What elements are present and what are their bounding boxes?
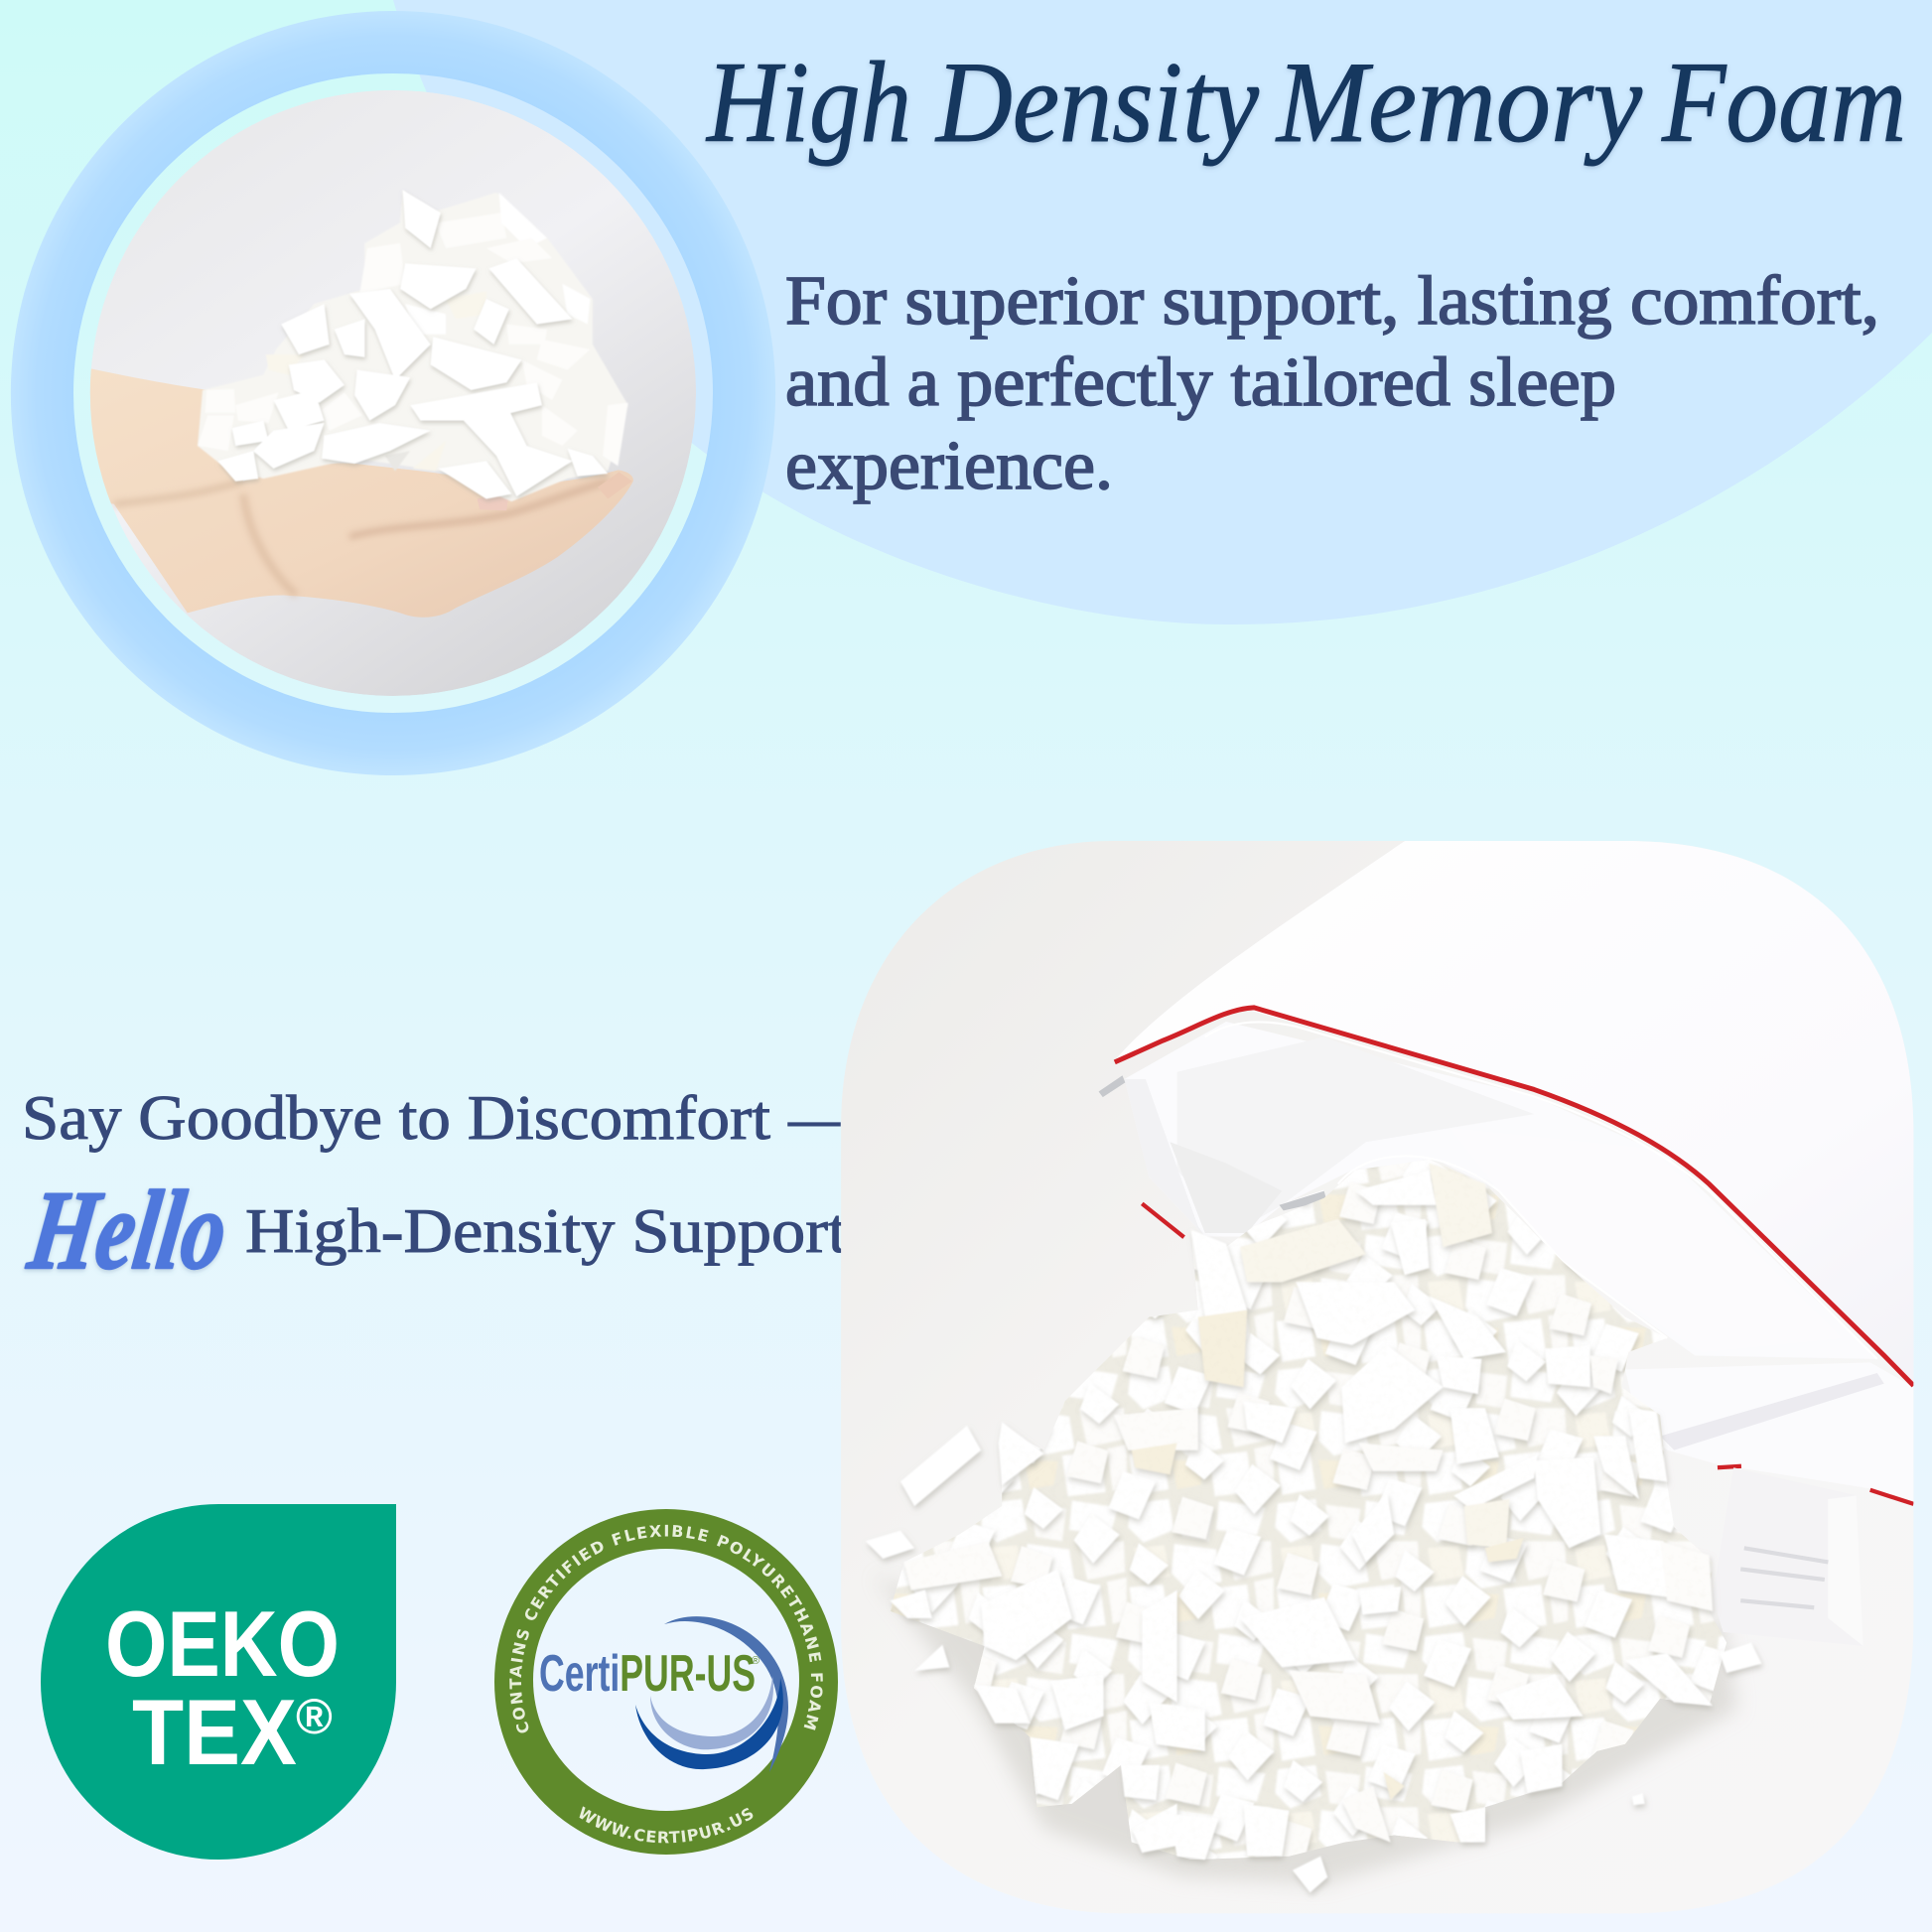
foam pile in hand xyxy=(198,190,628,501)
zipper pulls xyxy=(1099,1075,1326,1210)
badge: OEKO-TEX: ® xyxy=(296,1689,333,1744)
tagline line one: — xyxy=(787,1082,841,1153)
pillow opening xyxy=(1125,1022,1781,1352)
badge: CertiPUR-US xyxy=(494,1509,838,1855)
body text xyxy=(785,263,1879,504)
care label xyxy=(1720,1467,1829,1632)
badge: CertiPUR-US: WWW.CERTIPUR.US xyxy=(580,1806,753,1843)
badge: OEKO-TEX: TEX xyxy=(132,1680,297,1784)
title: High xyxy=(705,39,911,167)
badge: OEKO-TEX xyxy=(41,1504,396,1860)
shredded foam pile xyxy=(834,1142,1765,1898)
badge: CertiPUR-US: ® xyxy=(752,1655,759,1667)
title xyxy=(705,39,1906,167)
badge: OEKO-TEX: OEKO xyxy=(105,1591,340,1696)
script word Hello: Hello xyxy=(22,1168,234,1293)
foam chunks on top xyxy=(217,190,608,499)
photo: hand holding shredded foam xyxy=(86,90,696,696)
pile shadow xyxy=(876,1577,1737,1884)
hand and arm xyxy=(86,367,633,618)
red piping xyxy=(1115,1008,1913,1386)
title: Foam xyxy=(1661,39,1906,167)
logo wordmark: CertiPUR-US xyxy=(539,1645,756,1703)
tagline line one: Say Goodbye to Discomfort xyxy=(22,1082,770,1153)
badge: CertiPUR-US: CONTAINS CERTIFIED FLEXIBLE POLYURETHANE FOAM xyxy=(509,1525,823,1733)
title: Density xyxy=(934,39,1259,167)
body text: experience. xyxy=(785,428,1113,504)
panel: ring around hand photo xyxy=(11,11,775,775)
body text: and a perfectly tailored sleep xyxy=(785,345,1616,421)
tagline line two: High-Density Support xyxy=(245,1195,847,1266)
lower pillow flap xyxy=(1626,1368,1684,1404)
panel: top-right blue blob xyxy=(393,0,1932,624)
title: Memory xyxy=(1275,39,1642,167)
photo: pillow with spilled foam xyxy=(834,834,1932,1932)
tagline xyxy=(22,1082,847,1293)
logo swooshes xyxy=(635,1616,788,1772)
body text: For superior support, lasting comfort, xyxy=(785,263,1879,340)
pillow body xyxy=(1099,834,1926,1510)
